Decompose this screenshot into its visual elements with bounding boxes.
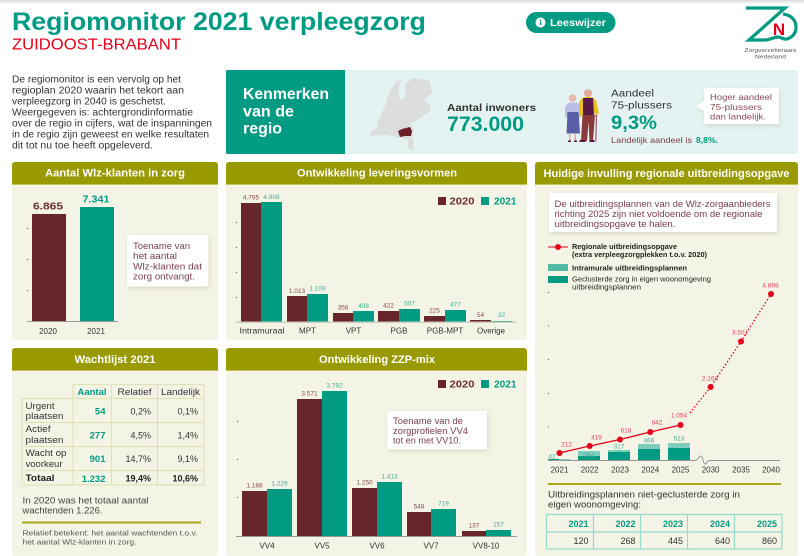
- table: wachtlijst: 1,4%: [177, 430, 198, 440]
- button: Leeswijzer: [526, 12, 616, 33]
- panel header: Huidige invulling regionale uitbreidingsopgave: [544, 168, 790, 180]
- bar chart: Wlz-klanten: 7.341: [82, 194, 110, 206]
- callout: Hoger aandeel: Hoger aandeel: [710, 92, 772, 102]
- callout: Toename zorgprofielen: zorgprofielen VV4: [393, 426, 468, 437]
- callout: uitbreidingsplannen: richting 2025 zijn niet voldoende om de regionale: [554, 209, 762, 220]
- logo: Zorgverzekeraars Nederland: [744, 8, 797, 60]
- callout: Toename Wlz-klanten: het aantal: [133, 251, 177, 262]
- panel header: [226, 348, 527, 371]
- panel: Wachtlijst 2021: [12, 348, 218, 556]
- bar chart: ZZP-mix: 3.571: [301, 390, 318, 398]
- stat: Aantal inwoners: [447, 102, 536, 136]
- panel header: Ontwikkeling leveringsvormen: [297, 168, 457, 180]
- intro text: verpleegzorg in 2040 is geschetst.: [12, 96, 166, 108]
- table: wachtlijst: 9,1%: [177, 454, 198, 464]
- line and bar chart: uitbreidingsopgave: 419: [591, 434, 602, 442]
- text: totaal 2020: In 2020 was het totaal aantal: [22, 496, 148, 506]
- bar chart: leveringsvormen: 507: [404, 300, 415, 308]
- stat: Aandeel 75-plussers: 9,3%: [611, 113, 657, 134]
- bar chart: leveringsvormen: 1.109: [309, 286, 326, 292]
- intro text: regioplan 2020 waarin het tekort aan: [12, 86, 184, 96]
- text: uitbreidingsplannen niet-geclusterd: Uitbreidingsplannen niet-geclusterde zorg in: [548, 490, 740, 500]
- callout: Toename Wlz-klanten: Wlz-klanten dat: [133, 262, 202, 272]
- line and bar chart: uitbreidingsopgave: 2.163: [702, 376, 719, 382]
- bar chart: ZZP-mix: 548: [414, 504, 425, 510]
- table: wachtlijst: 54: [95, 406, 106, 418]
- callout: Hoger aandeel: [696, 88, 779, 124]
- line and bar chart: uitbreidingsopgave: 618: [621, 428, 632, 434]
- stat: Aandeel 75-plussers: Aandeel: [611, 88, 654, 100]
- table: wachtlijst: 0,1%: [177, 406, 198, 416]
- table: wachtlijst: Relatief: [118, 387, 152, 397]
- text: uitbreidingsplannen niet-geclusterd: eigen woonomgeving:: [548, 500, 641, 510]
- bar chart: leveringsvormen: 408: [358, 303, 369, 310]
- table: wachtlijst: 0,2%: [130, 406, 151, 416]
- bar chart: ZZP-mix: 1.250: [356, 480, 373, 486]
- table: wachtlijst: Urgent: [26, 401, 55, 411]
- panel: Huidige invulling regionale uitbreidingsopgave: [535, 162, 798, 556]
- table: wachtlijst: 4,5%: [130, 430, 151, 440]
- table: wachtlijst: 277: [90, 430, 106, 442]
- intro text: dit tot nu toe heeft opgeleverd.: [12, 140, 153, 152]
- bar chart: leveringsvormen: 4.795: [243, 194, 260, 202]
- table: wachtlijst: Aantal: [78, 387, 106, 397]
- panel: Aantal Wlz-klanten in zorg: [12, 162, 218, 340]
- line and bar chart: uitbreidingsopgave: 4.898: [762, 282, 779, 290]
- text: uitbreidingsplannen niet-geclusterd: [548, 490, 740, 510]
- legend: [438, 380, 517, 390]
- legend: uitbreidingsopgave: (extra verpleegzorgplekken t.o.v. 2020): [572, 252, 707, 259]
- table: wachtlijst: 1.232: [82, 474, 106, 485]
- line and bar chart: uitbreidingsopgave: 2025: [672, 466, 690, 474]
- footnote: relatief: Relatief betekent: het aantal wachtenden t.o.v.: [22, 528, 198, 538]
- bar chart: leveringsvormen: VPT: [346, 326, 361, 336]
- callout: Hoger aandeel: 75-plussers: [710, 102, 762, 112]
- bar chart: ZZP-mix: 1.229: [271, 480, 288, 488]
- table: wachtlijst: plaatsen: [26, 411, 64, 421]
- line and bar chart: uitbreidingsopgave: 42: [548, 454, 556, 460]
- panel header: [226, 162, 527, 185]
- table: wachtlijst: Actief: [26, 424, 51, 434]
- table: niet-geclusterde zorg: 640: [715, 536, 730, 546]
- table: niet-geclusterde zorg: 268: [620, 536, 636, 546]
- legend: 2020: [450, 380, 475, 390]
- intro text: over de regio in cijfers, wat de inspanningen: [12, 118, 212, 130]
- line and bar chart: uitbreidingsopgave: 842: [652, 420, 663, 426]
- text: totaal 2020: [22, 496, 149, 516]
- legend: uitbreidingsopgave: Intramurale uitbreidingsplannen: [572, 266, 687, 272]
- callout: uitbreidingsplannen: uitbreidingsopgave te halen.: [554, 219, 676, 230]
- button: Leeswijzer: Leeswijzer: [550, 18, 606, 29]
- legend: uitbreidingsopgave: uitbreidingsplannen: [572, 284, 641, 292]
- bar chart: leveringsvormen: PGB-MPT: [427, 326, 463, 336]
- callout: Toename zorgprofielen: tot en met VV10.: [393, 436, 461, 446]
- callout: uitbreidingsplannen: De uitbreidingsplannen van de Wlz-zorgaanbieders: [554, 199, 771, 210]
- table: wachtlijst: [22, 384, 204, 485]
- bar chart: ZZP-mix: VV8-10: [473, 542, 500, 550]
- panel: Kenmerken van de regio: [226, 70, 798, 154]
- legend: 2021: [494, 196, 517, 208]
- bar chart: ZZP-mix: 719: [438, 500, 449, 508]
- bar chart: leveringsvormen: 32: [498, 312, 505, 319]
- table: wachtlijst: Totaal: [26, 473, 54, 483]
- legend: 2021: [494, 380, 517, 390]
- bar chart: leveringsvormen: 4.808: [263, 194, 280, 201]
- legend: uitbreidingsopgave: [548, 244, 711, 292]
- table: wachtlijst: Wacht op: [26, 448, 66, 458]
- line and bar chart: uitbreidingsopgave: 1.054: [671, 412, 688, 420]
- panel header: [12, 162, 218, 185]
- heading block: Kenmerken van de regio: regio: [243, 120, 282, 138]
- legend: uitbreidingsopgave: Regionale uitbreidingsopgave: [572, 244, 677, 251]
- panel: Ontwikkeling leveringsvormen: [226, 162, 527, 340]
- bar chart: Wlz-klanten: 2021: [87, 327, 105, 336]
- callout: Toename Wlz-klanten: [127, 235, 208, 286]
- heading block: Kenmerken van de regio: [226, 70, 345, 154]
- line and bar chart: uitbreidingsopgave: 2030: [702, 466, 720, 474]
- bar chart: ZZP-mix: VV6: [369, 542, 385, 550]
- intro text: De regiomonitor is een vervolg op het: [12, 74, 181, 86]
- line and bar chart: uitbreidingsopgave: 2021: [551, 466, 569, 474]
- footnote: relatief: het aantal Wlz-klanten in zorg.: [22, 538, 136, 546]
- callout: Toename Wlz-klanten: Toename van: [133, 241, 190, 252]
- logo: Zorgverzekeraars Nederland: Zorgverzekeraars: [744, 48, 797, 54]
- line and bar chart: uitbreidingsopgave: 212: [561, 442, 572, 448]
- line and bar chart: uitbreidingsopgave: 2023: [611, 466, 629, 474]
- bar chart: Wlz-klanten: 2020: [39, 327, 57, 336]
- footnote: relatief: [22, 528, 198, 546]
- bar chart: leveringsvormen: 477: [450, 302, 461, 308]
- line and bar chart: uitbreidingsopgave: 2024: [641, 466, 660, 474]
- bar chart: leveringsvormen: 1.013: [289, 288, 306, 295]
- logo: Zorgverzekeraars Nederland: N: [773, 20, 785, 39]
- line and bar chart: uitbreidingsopgave: 2035: [732, 466, 750, 474]
- bar chart: leveringsvormen: PGB: [391, 326, 407, 336]
- line and bar chart: uitbreidingsopgave: [548, 282, 780, 474]
- table: niet-geclusterde zorg: 2024: [710, 519, 730, 529]
- bar chart: leveringsvormen: [236, 194, 516, 336]
- stat: Aantal inwoners: Aantal inwoners: [447, 102, 536, 114]
- table: wachtlijst: 901: [90, 454, 106, 465]
- line and bar chart: uitbreidingsopgave: 2022: [581, 466, 599, 474]
- table: niet-geclusterde zorg: 2021: [568, 519, 588, 529]
- callout: uitbreidingsplannen: [549, 193, 777, 232]
- bar chart: Wlz-klanten: [27, 194, 118, 336]
- line and bar chart: uitbreidingsopgave: 466: [644, 438, 655, 444]
- bar chart: ZZP-mix: 3.792: [326, 382, 343, 390]
- heading block: Kenmerken van de regio: Kenmerken: [243, 86, 329, 103]
- callout: Hoger aandeel: dan landelijk.: [710, 112, 766, 122]
- text: totaal 2020: wachtenden 1.226.: [22, 506, 103, 516]
- bar chart: ZZP-mix: VV5: [314, 542, 330, 550]
- legend: uitbreidingsopgave: Geclusterde zorg in eigen woonomgeving: [572, 276, 711, 284]
- bar chart: leveringsvormen: Intramuraal: [240, 326, 285, 336]
- table: niet-geclusterde zorg: 445: [668, 536, 683, 546]
- stat: Aandeel 75-plussers: 8,8%.: [696, 135, 718, 145]
- table: niet-geclusterde zorg: 860: [762, 536, 777, 546]
- bar chart: leveringsvormen: 225: [429, 308, 440, 314]
- bar chart: leveringsvormen: 54: [477, 312, 484, 319]
- panel header: [535, 162, 798, 185]
- bar chart: Wlz-klanten: 6.865: [33, 202, 64, 212]
- panel: Ontwikkeling ZZP-mix: [226, 348, 527, 556]
- heading block: Kenmerken van de regio: van de: [243, 104, 294, 120]
- line and bar chart: uitbreidingsopgave: 2040: [762, 466, 780, 474]
- icon: elderly couple: [565, 89, 599, 142]
- panel header: Wachtlijst 2021: [74, 354, 156, 366]
- bar chart: ZZP-mix: 157: [493, 522, 504, 528]
- line and bar chart: uitbreidingsopgave: 513: [674, 436, 685, 442]
- bar chart: ZZP-mix: 137: [469, 522, 480, 530]
- table: wachtlijst: 19,4%: [125, 474, 151, 484]
- stat: Aandeel 75-plussers: 75-plussers: [611, 100, 672, 112]
- title: Regiomonitor 2021 verpleegzorg: [12, 8, 426, 36]
- line and bar chart: uitbreidingsopgave: 3.501: [732, 330, 749, 336]
- logo: Zorgverzekeraars Nederland: Nederland: [755, 54, 786, 60]
- bar chart: ZZP-mix: VV7: [423, 542, 439, 550]
- intro text: in de regio zijn geweest en welke resultaten: [12, 130, 209, 140]
- table: niet-geclusterde zorg: 2023: [663, 519, 683, 529]
- table: niet-geclusterde zorg: 120: [573, 536, 588, 546]
- table: wachtlijst: Landelijk: [161, 387, 201, 397]
- icon: map of the Netherlands: [370, 78, 432, 150]
- callout: Toename zorgprofielen: Toename van de: [393, 416, 463, 427]
- stat: Aandeel 75-plussers: [611, 88, 718, 145]
- table: niet-geclusterde zorg: [546, 514, 782, 550]
- line and bar chart: uitbreidingsopgave: 317: [614, 444, 625, 450]
- legend: 2020: [450, 196, 475, 208]
- intro text: [12, 74, 212, 152]
- stat: Aantal inwoners: 773.000: [447, 113, 524, 136]
- panel header: [12, 348, 218, 371]
- table: wachtlijst: 14,7%: [125, 454, 151, 464]
- callout: Toename Wlz-klanten: zorg ontvangt.: [133, 272, 195, 282]
- bar chart: ZZP-mix: VV4: [259, 542, 275, 550]
- line and bar chart: uitbreidingsopgave: 264: [584, 452, 595, 460]
- table: niet-geclusterde zorg: 2025: [757, 519, 777, 529]
- bar chart: leveringsvormen: Overige: [477, 326, 506, 336]
- panel header: Ontwikkeling ZZP-mix: [319, 354, 436, 366]
- bar chart: ZZP-mix: [236, 382, 517, 550]
- callout: Toename zorgprofielen: [388, 411, 487, 450]
- intro text: Weergegeven is: achtergrondinformatie: [12, 108, 193, 118]
- table: wachtlijst: 10,6%: [172, 474, 198, 484]
- bar chart: leveringsvormen: 422: [383, 302, 394, 310]
- legend: [438, 196, 517, 208]
- table: wachtlijst: voorkeur: [26, 459, 63, 469]
- stat: Aandeel 75-plussers: Landelijk aandeel is: [611, 135, 692, 145]
- table: niet-geclusterde zorg: 2022: [615, 519, 636, 529]
- bar chart: ZZP-mix: 1.188: [246, 482, 263, 490]
- panel header: Aantal Wlz-klanten in zorg: [45, 168, 185, 180]
- bar chart: leveringsvormen: MPT: [299, 326, 316, 336]
- bar chart: ZZP-mix: 1.413: [381, 474, 398, 480]
- subtitle: region: ZUIDOOST-BRABANT: [12, 36, 181, 54]
- bar chart: leveringsvormen: 356: [338, 304, 349, 312]
- table: wachtlijst: plaatsen: [26, 435, 64, 445]
